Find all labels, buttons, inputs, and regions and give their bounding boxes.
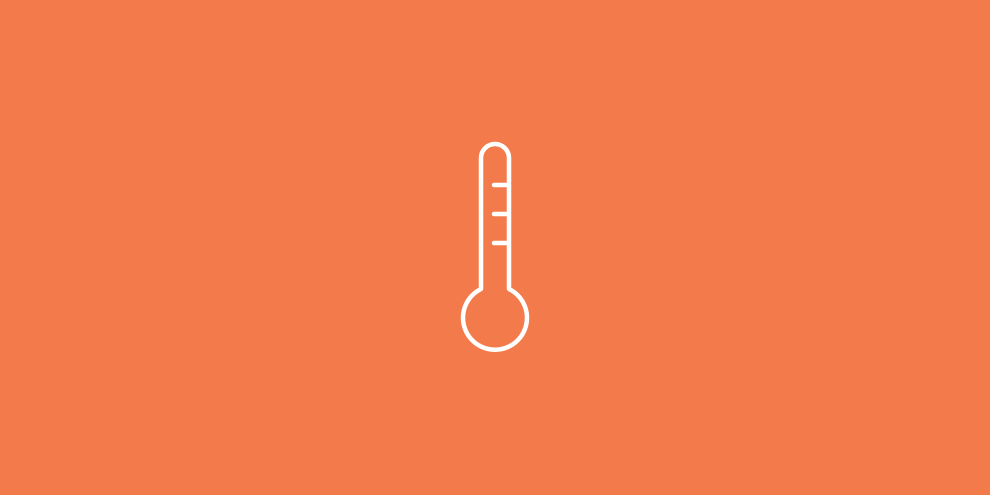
icon: thermometer xyxy=(463,144,527,350)
